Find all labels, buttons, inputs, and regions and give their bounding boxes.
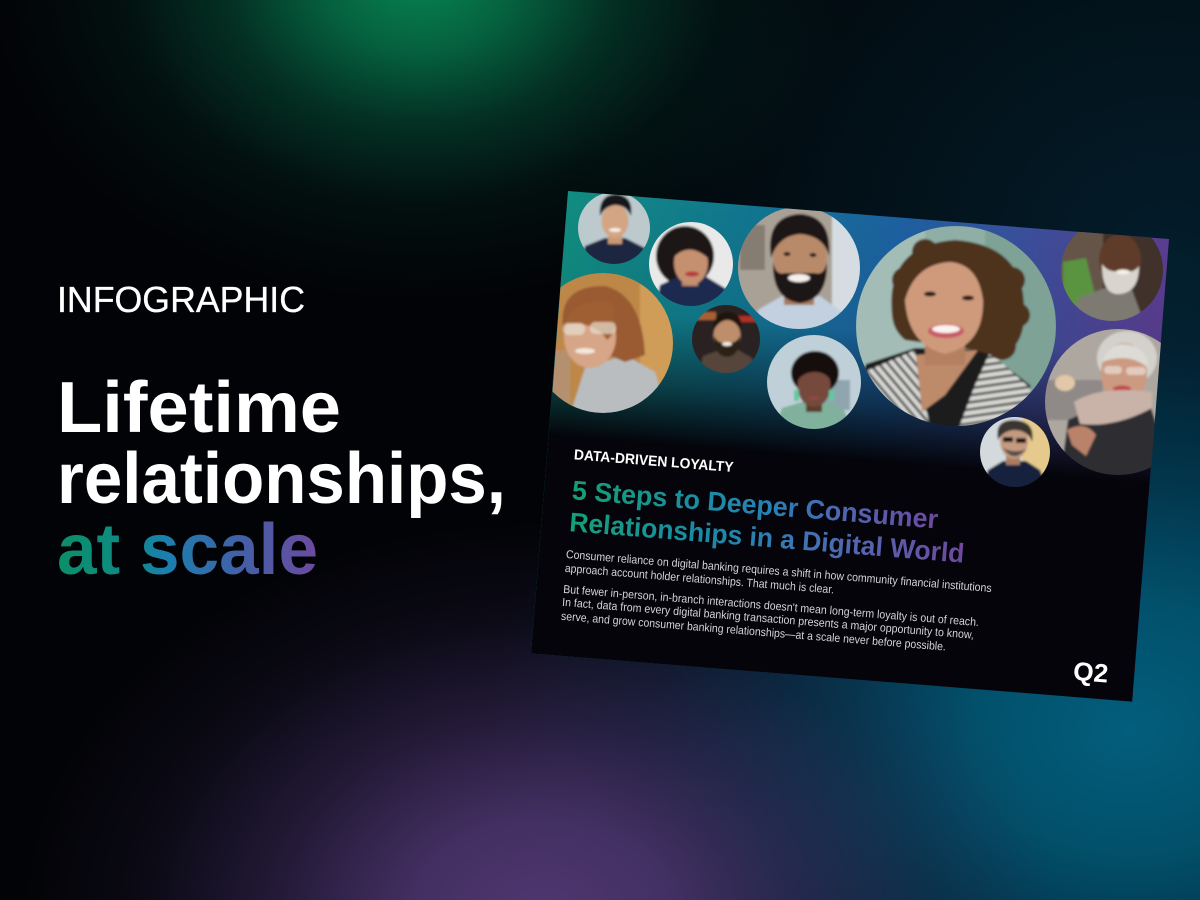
portrait: man with glasses in dark jacket — [980, 417, 1050, 487]
cover eyebrow: DATA-DRIVEN LOYALTY — [573, 447, 734, 476]
cover body text: serve, and grow consumer banking relationships—at a scale never before possible. — [561, 611, 946, 654]
Q2 logo: Q2 — [1072, 656, 1109, 689]
portrait: young man in navy — [578, 194, 650, 264]
main heading: relationships, — [57, 439, 506, 519]
cover body text: approach account holder relationships. That much is clear. — [564, 563, 834, 596]
infographic canvas — [59, 191, 1169, 702]
cover panel with gradient and text — [531, 191, 1169, 702]
main heading — [57, 368, 506, 590]
cover body text: In fact, data from every digital banking transaction presents a major opportunity to know, — [562, 597, 974, 642]
portrait: older man with white beard — [1061, 232, 1163, 321]
portrait: bearded man in light shirt — [738, 208, 860, 329]
main heading: Lifetime — [57, 368, 341, 448]
cover title — [568, 475, 968, 569]
eyebrow label: INFOGRAPHIC: INFOGRAPHIC — [57, 279, 305, 320]
portrait: woman with dark hair — [649, 222, 733, 306]
portrait: older woman with scarf — [1045, 329, 1161, 475]
cover title: Relationships in a Digital World — [568, 507, 966, 569]
main heading: at scale — [57, 510, 318, 590]
portrait: large woman with curly hair — [855, 225, 1057, 430]
cover title: 5 Steps to Deeper Consumer — [571, 475, 940, 535]
portraits collage — [530, 190, 1193, 490]
portrait: woman with glasses — [552, 273, 673, 413]
portrait: smiling man in plaid — [692, 305, 760, 373]
cover body text: But fewer in-person, in-branch interactions doesn't mean long-term loyalty is out of reach. — [563, 584, 979, 629]
tilted report cover — [530, 190, 1193, 702]
portrait: woman with green earrings — [765, 333, 863, 431]
cover body text — [561, 549, 992, 657]
cover body text: Consumer reliance on digital banking requires a shift in how community financial institutions — [566, 549, 992, 595]
